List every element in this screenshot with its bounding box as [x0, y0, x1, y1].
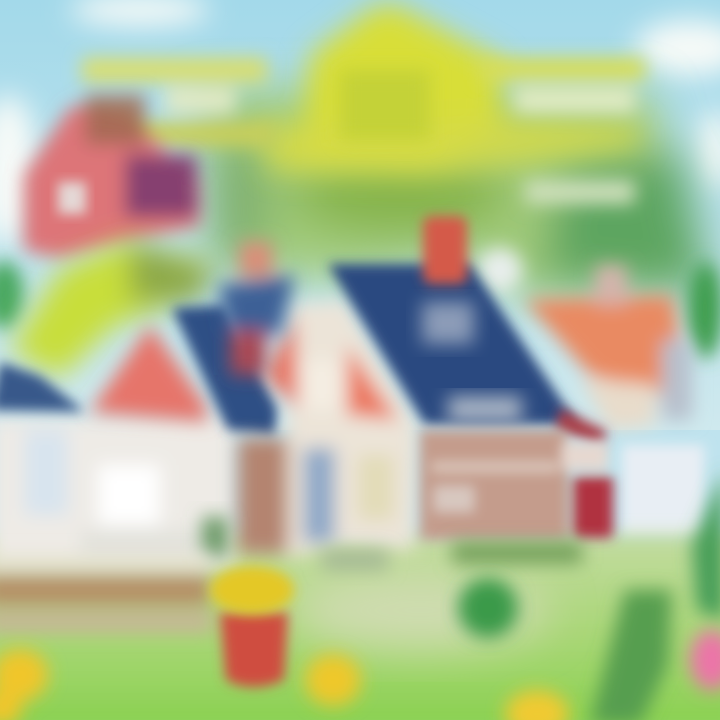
background trees and yellow-green foliage	[0, 4, 720, 358]
green shrub below house	[202, 517, 582, 570]
sky	[0, 0, 720, 430]
left green hedge	[10, 240, 215, 378]
round green bush	[458, 578, 518, 638]
main blue roof	[328, 264, 608, 445]
left white house	[0, 305, 278, 568]
brown fence	[0, 555, 213, 632]
window	[58, 182, 86, 214]
right foreground plant	[590, 470, 720, 720]
ground	[0, 535, 720, 720]
central house walls	[238, 300, 418, 558]
central tower roof	[218, 242, 295, 375]
red house top left	[24, 95, 200, 258]
right orange-roof house	[478, 248, 704, 540]
flowers	[0, 630, 720, 720]
brick house wall	[420, 430, 613, 540]
chimney	[423, 216, 467, 284]
flower pot	[210, 566, 294, 687]
